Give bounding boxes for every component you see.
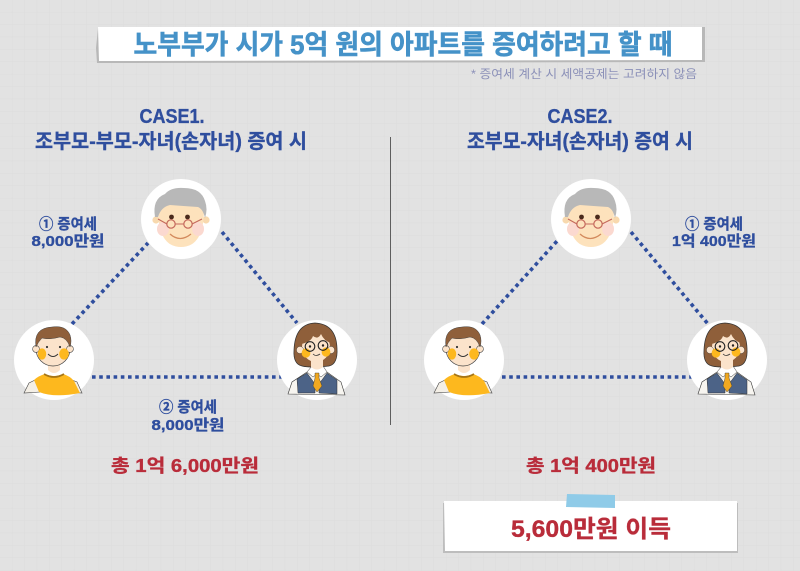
- label: second gift tax: ② 증여세: [159, 399, 217, 416]
- heading: case 1: CASE1.: [140, 106, 204, 128]
- tape: [566, 494, 615, 508]
- dotted connector lines: [72, 232, 297, 377]
- label: first gift tax: ① 증여세: [39, 216, 97, 233]
- total: case 1: 총 1억 6,000만원: [111, 456, 259, 476]
- label: second gift tax: 8,000만원: [152, 417, 224, 434]
- heading: case 1: [35, 106, 307, 153]
- icon: parent: [14, 320, 94, 400]
- diagram: case 1: [14, 179, 357, 434]
- icon: grandchild: [277, 320, 357, 400]
- icon: grandparent: [141, 179, 221, 259]
- label: first gift tax: [32, 216, 104, 250]
- heading: case 2: CASE2.: [548, 106, 612, 128]
- heading: case 1: 조부모-부모-자녀(손자녀) 증여 시: [35, 130, 307, 153]
- label: first gift tax: 8,000만원: [32, 233, 104, 250]
- icon: child: [424, 320, 504, 400]
- heading: case 2: 조부모-자녀(손자녀) 증여 시: [467, 130, 693, 153]
- diagram: case 2: [424, 179, 767, 400]
- label: gift tax: ① 증여세: [685, 216, 743, 233]
- footnote: * 증여세 계산 시 세액공제는 고려하지 않음: [471, 67, 697, 81]
- callout: savings: 5,600만원 이득: [511, 516, 671, 543]
- label: second gift tax: [152, 399, 224, 434]
- title banner: 노부부가 시가 5억 원의 아파트를 증여하려고 할 때: [134, 30, 672, 60]
- label: gift tax: [672, 216, 756, 250]
- icon: grandparent: [551, 179, 631, 259]
- icon: grandchild: [687, 320, 767, 400]
- callout: savings: [443, 494, 738, 553]
- dotted connector lines: [482, 232, 708, 377]
- heading: case 2: [467, 106, 693, 153]
- label: gift tax: 1억 400만원: [672, 233, 756, 250]
- center divider: [390, 137, 392, 425]
- total: case 2: 총 1억 400만원: [526, 456, 656, 476]
